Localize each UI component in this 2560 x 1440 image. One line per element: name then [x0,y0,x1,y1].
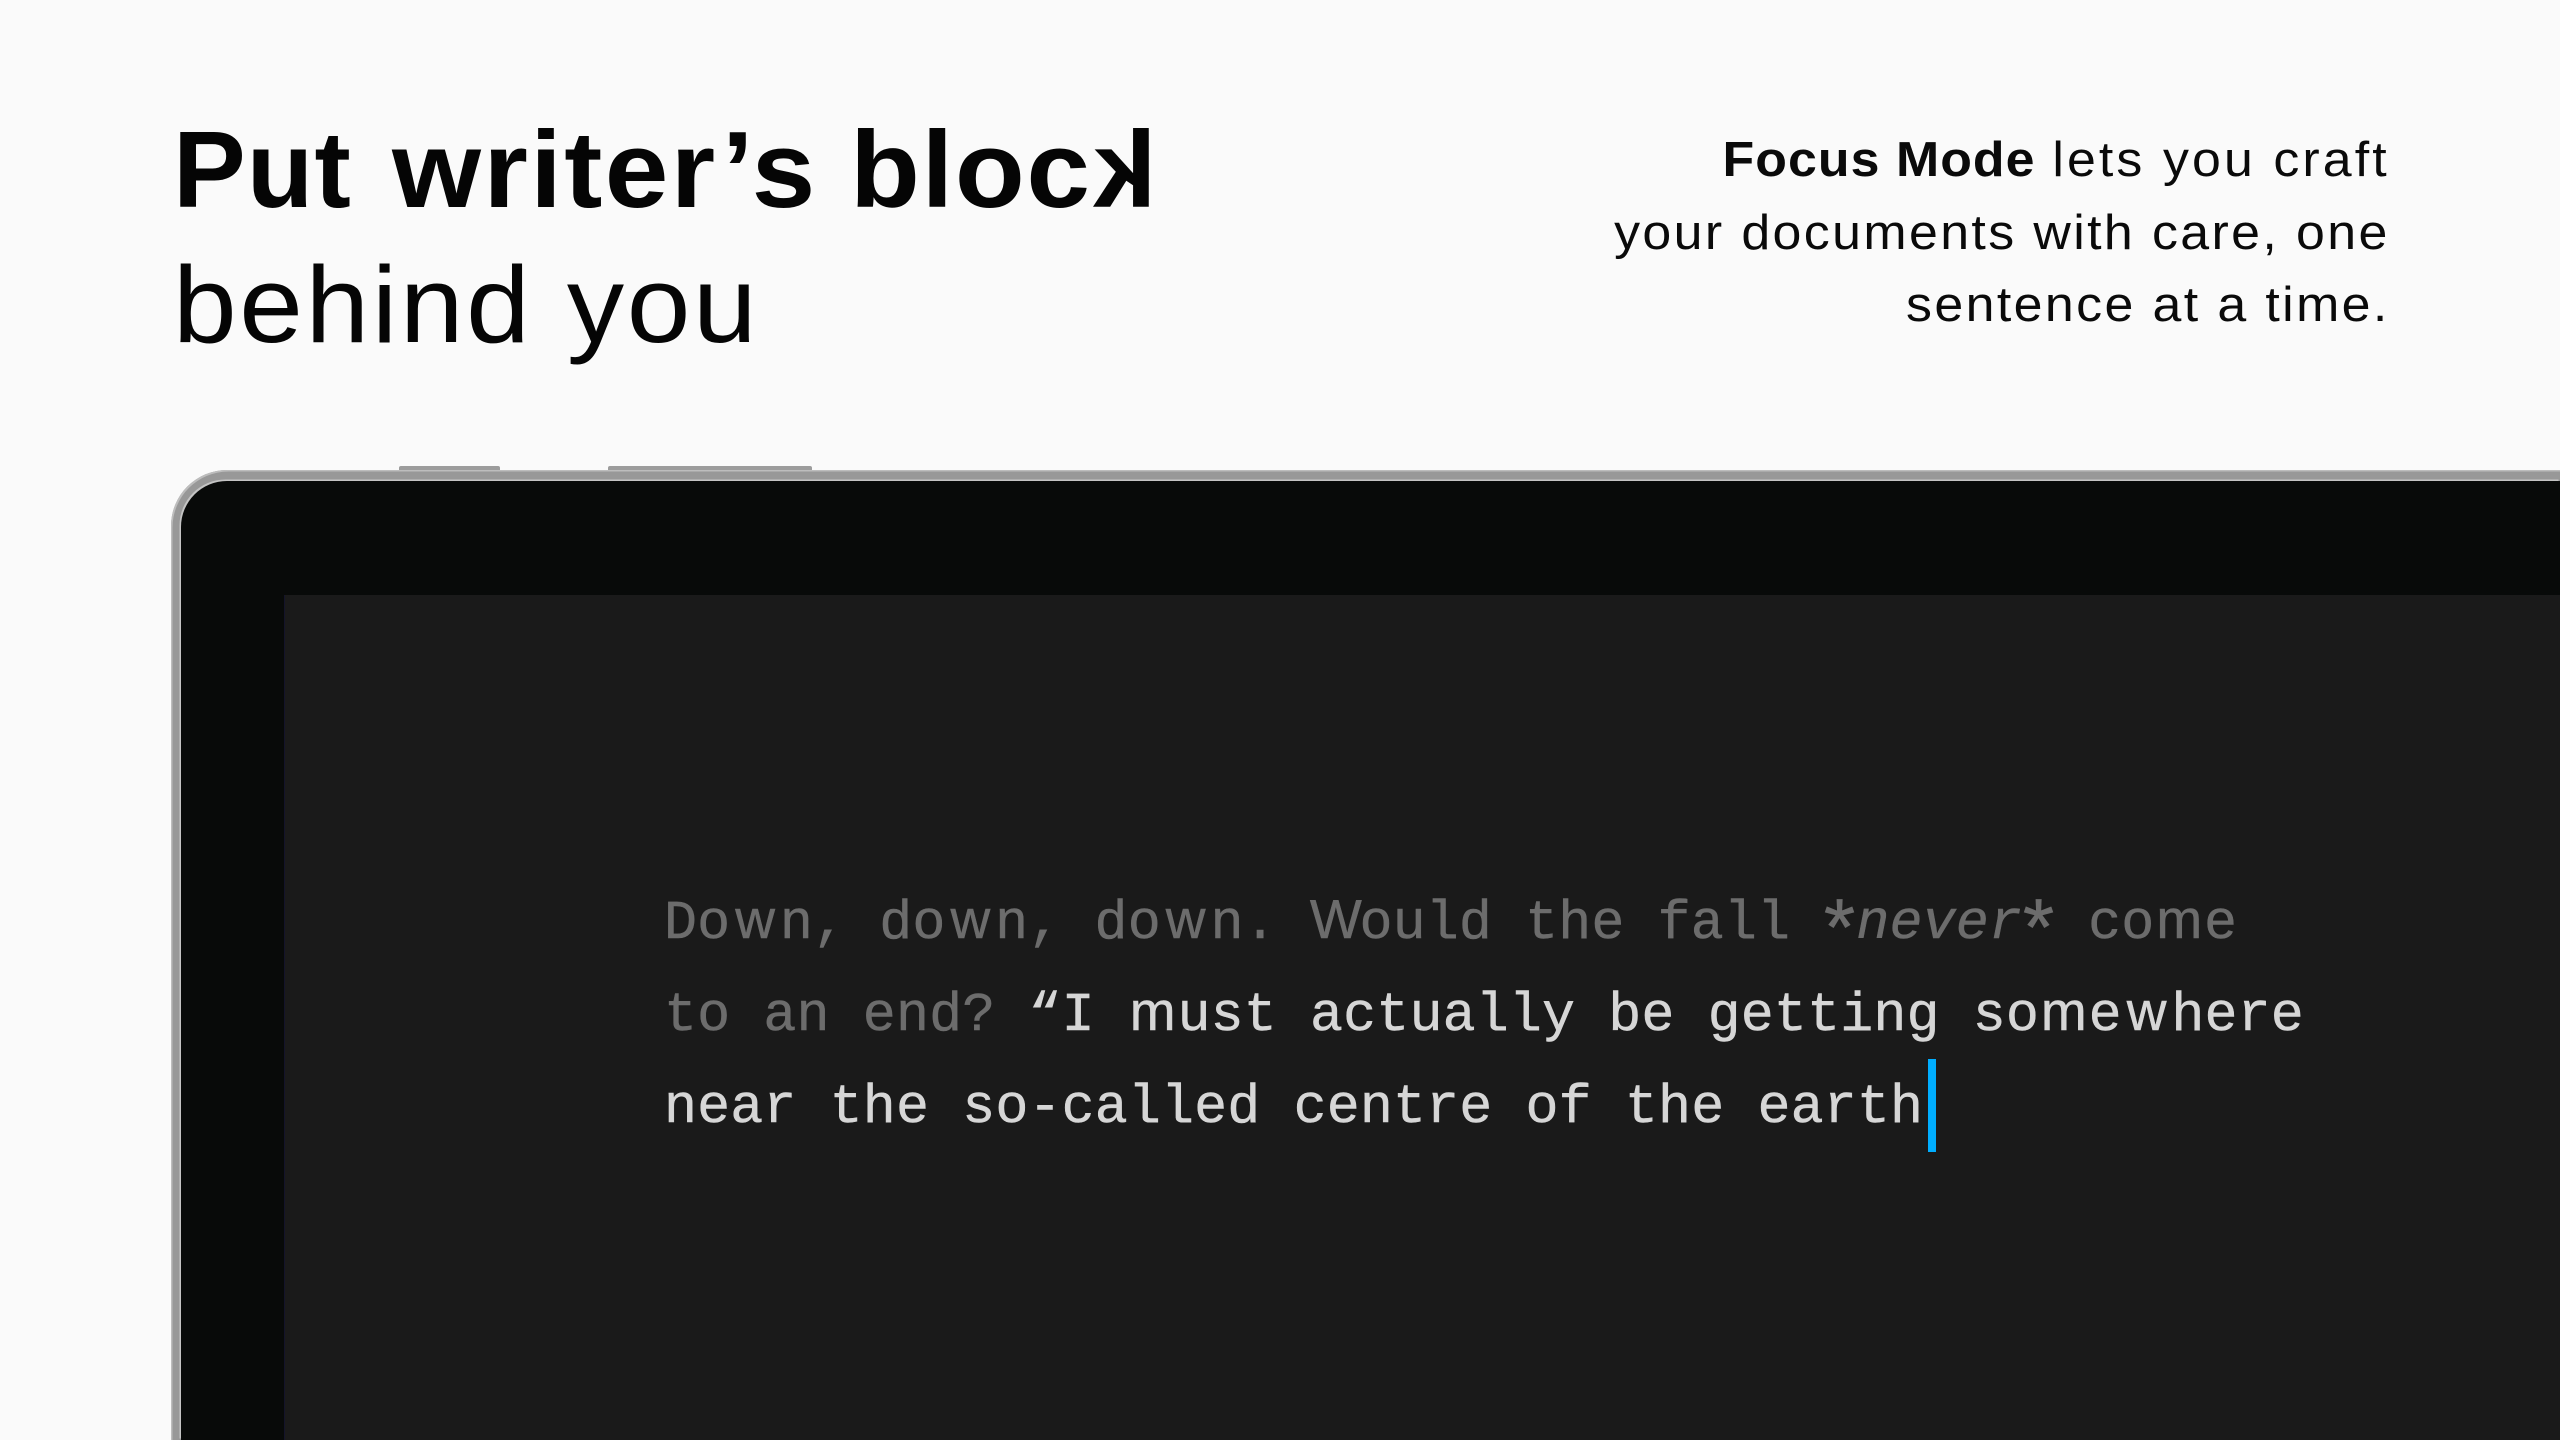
line 2, dimmed then focused: to an end? “I ust actually be getting so e here [664,984,2304,1047]
line 1, dimmed: m [2156,888,2202,950]
heading word: Put: Put [173,109,352,231]
line 2, dimmed then focused: m [1130,980,1176,1042]
heading word: writer's: writer’s [392,109,818,231]
cursor [1928,1059,1936,1152]
heading word: block, with mirrored k: bloc [850,109,1092,231]
heading line 2: behind you [173,244,759,366]
line 2, dimmed then focused: m [2041,980,2087,1042]
line 1, dimmed: W [1310,888,1362,950]
editor text [664,888,2304,1139]
description text: your documents with care, one [1614,204,2390,260]
heading: Put writer's block behind you [173,109,1157,366]
button left [399,466,500,474]
device buttons [399,466,812,470]
line 1, dimmed: Do n, do n, do n. ould the fall never co e [664,892,2237,955]
line 1, dimmed: w [950,888,990,950]
line 1, dimmed: * [1816,891,1864,982]
line 1, dimmed: * [2015,891,2063,982]
line 1, dimmed: w [735,888,775,950]
bezel [181,481,2560,1440]
screen [285,595,2560,1440]
description text [1614,132,2390,332]
device frame [171,470,2560,1440]
line 1, dimmed: w [1166,888,1206,950]
description text: sentence at a time. [1906,277,2390,332]
button right [608,466,812,474]
line 1, dimmed [664,888,2237,982]
line 3, focused: near the so-called centre of the earth [664,1076,1923,1139]
heading word: block, with mirrored k: k [1092,109,1157,231]
line 2, dimmed then focused: w [2127,980,2166,1042]
description text: Focus Mode lets you craft [1723,132,2390,187]
